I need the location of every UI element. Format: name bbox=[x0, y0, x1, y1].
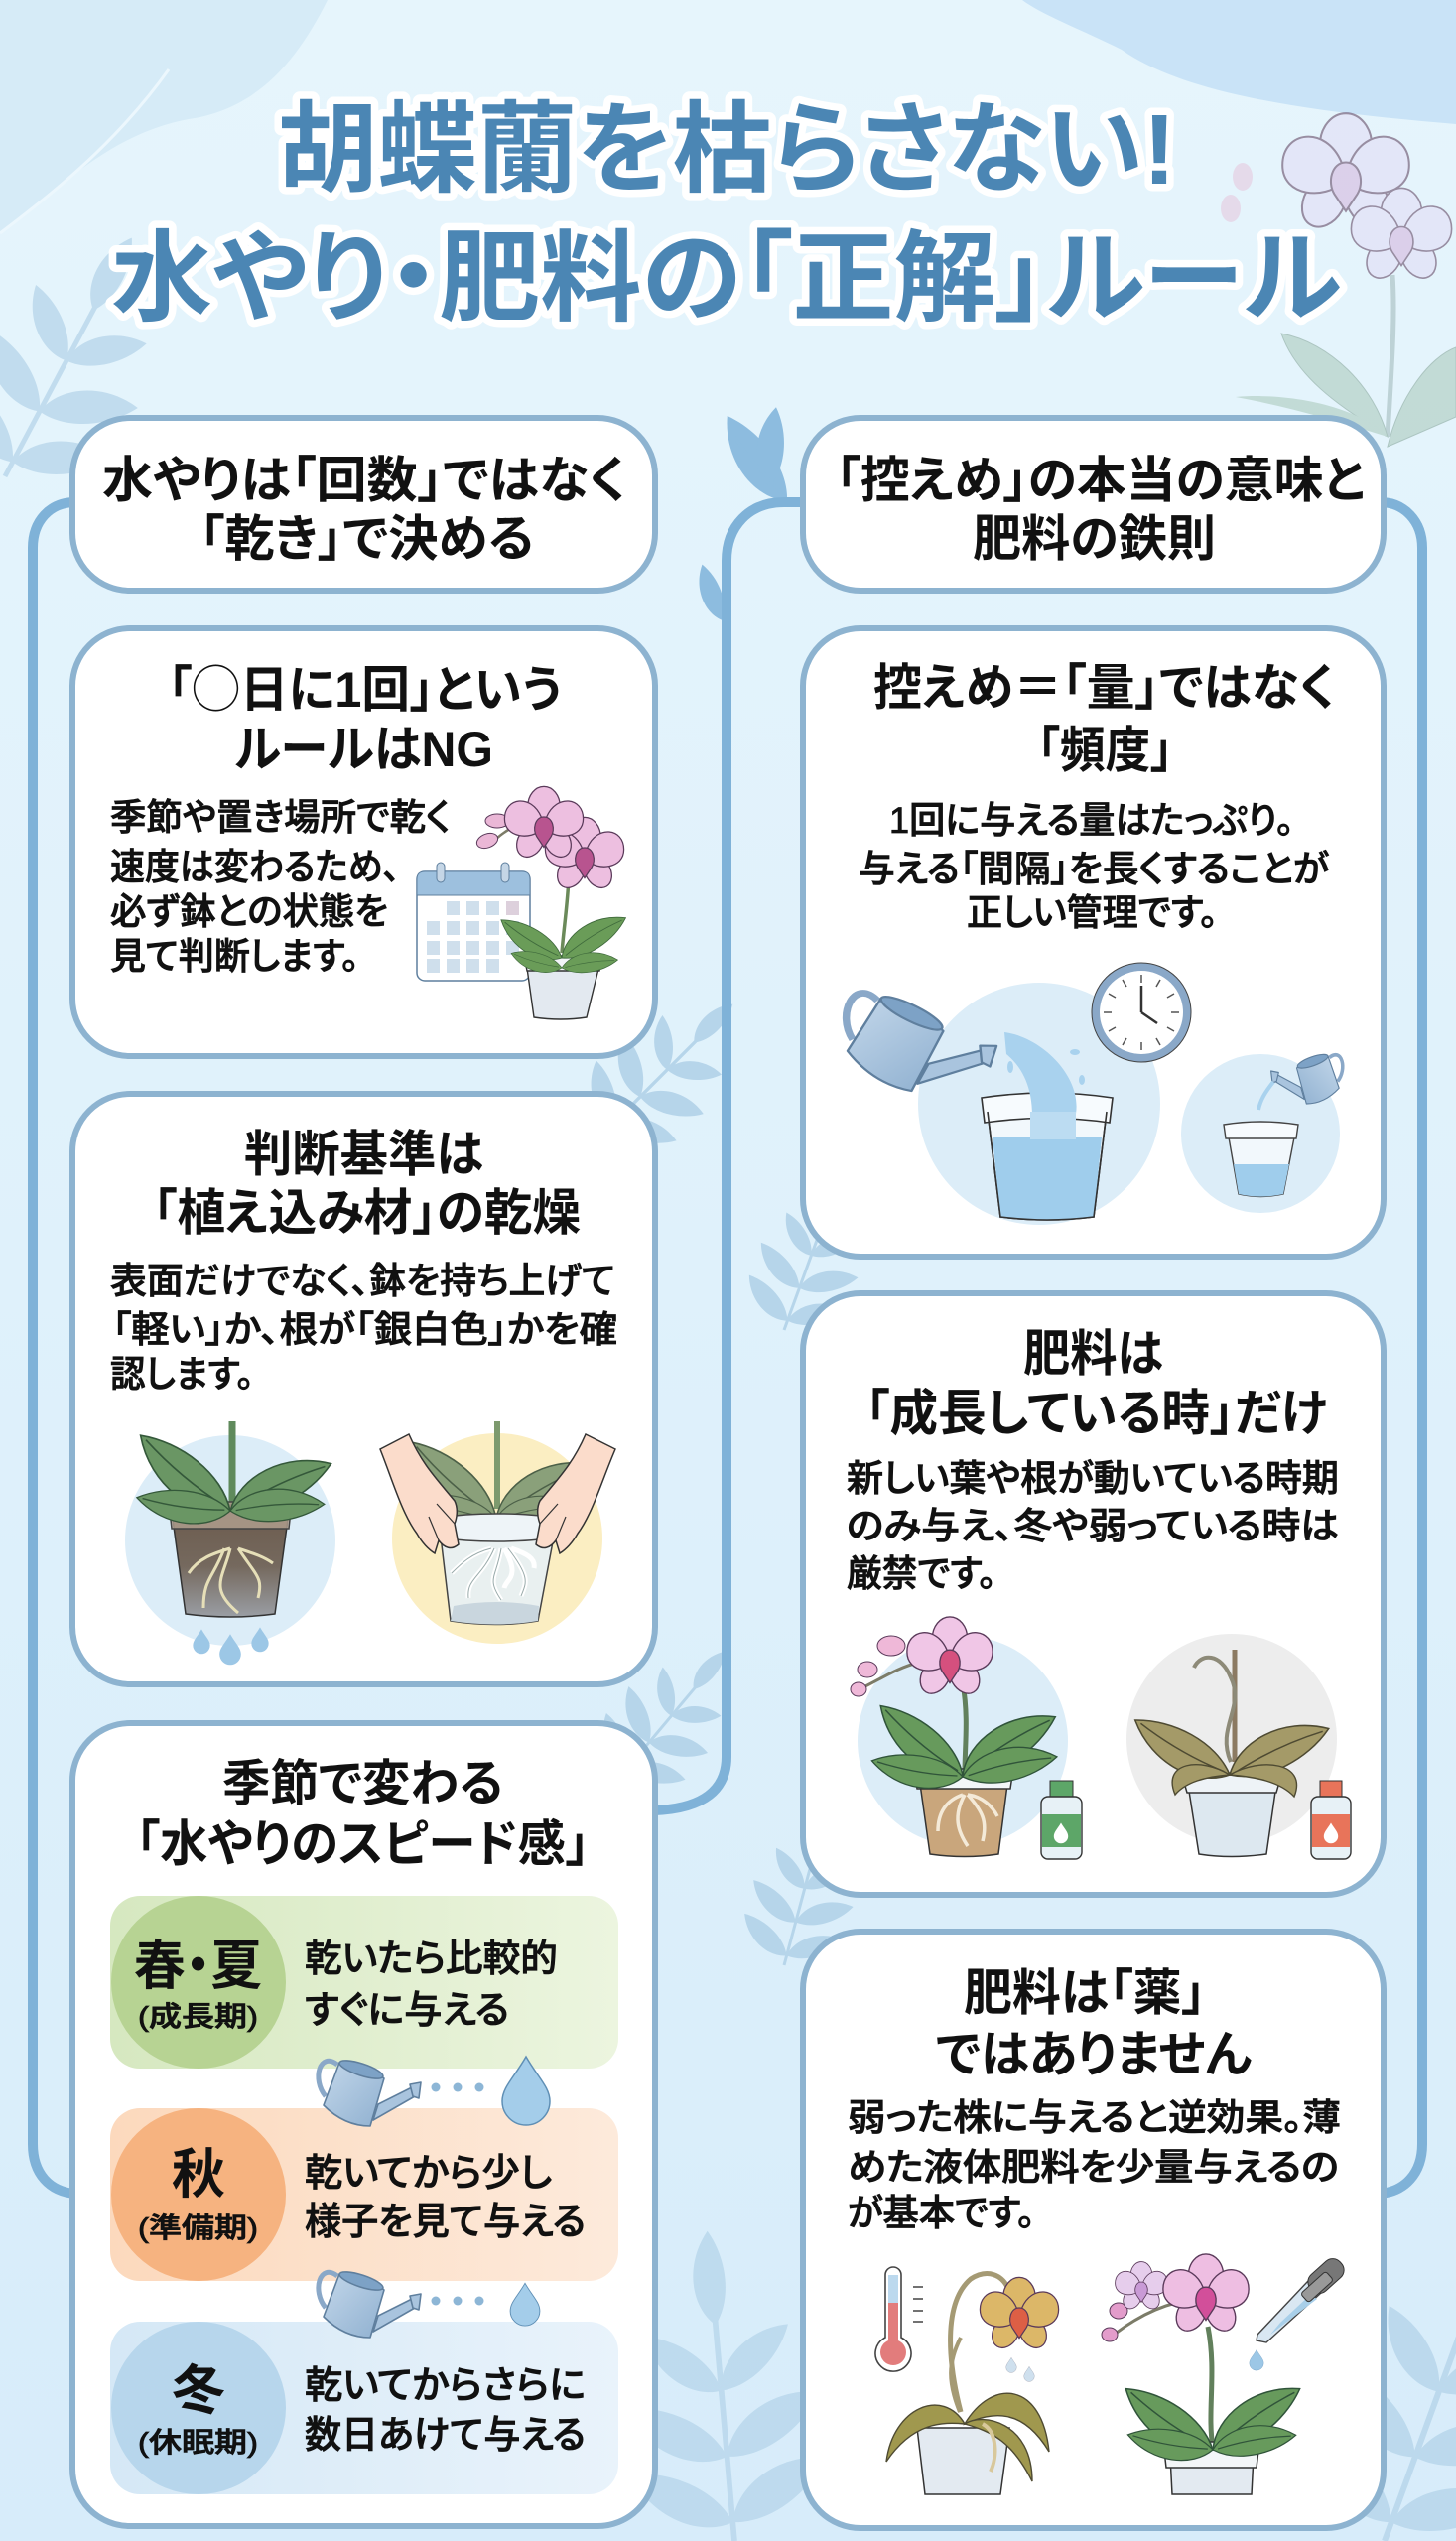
season row: winter: (休眠期) bbox=[138, 2427, 258, 2458]
heading: 判断基準は bbox=[244, 1127, 483, 1182]
heading bbox=[936, 1965, 1253, 2082]
heading: 肥料は「薬」 bbox=[964, 1965, 1206, 2021]
season row: autumn: 様子を見て与える bbox=[305, 2202, 586, 2243]
season row: winter bbox=[110, 2322, 618, 2494]
illustration: wilted orchid bbox=[886, 2274, 1059, 2494]
connector frame lines bbox=[33, 502, 1422, 2194]
body text: 「軽い」か、根が「銀白色」かを確 bbox=[112, 1309, 617, 1350]
heading: 「成長している時」だけ bbox=[865, 1386, 1327, 1441]
illustration: wet pot bbox=[125, 1421, 337, 1665]
body text: 見て判断します。 bbox=[110, 936, 359, 977]
panel: left header bbox=[72, 418, 655, 591]
heading: 「◯日に1回」という bbox=[168, 650, 562, 722]
illustration: healthy orchid bbox=[851, 1617, 1068, 1856]
body text bbox=[110, 797, 451, 977]
illustration: small watering bbox=[1181, 1052, 1343, 1213]
body text bbox=[859, 800, 1330, 933]
decoration: faded orchid bbox=[1221, 113, 1456, 447]
panel: left header: 水やりは「回数」ではなく bbox=[102, 453, 626, 508]
season row: spring summer: すぐに与える bbox=[305, 1990, 509, 2032]
icon: thermometer bbox=[875, 2267, 923, 2371]
panel: 判断基準 bbox=[72, 1094, 655, 1684]
heading: 「頻度」 bbox=[1037, 723, 1173, 778]
heading: 季節で変わる bbox=[222, 1756, 503, 1811]
panel: 季節 bbox=[72, 1723, 655, 2526]
season row: spring summer: (成長期) bbox=[138, 2001, 258, 2032]
heading bbox=[873, 660, 1335, 778]
illustration: healthy orchid with dropper bbox=[1102, 2254, 1308, 2494]
body text: が基本です。 bbox=[848, 2193, 1035, 2233]
title: 水やり・肥料の「正解」ルール bbox=[111, 223, 1342, 334]
icon: watering can with small drop bbox=[319, 2268, 540, 2338]
season row: autumn bbox=[110, 2108, 618, 2281]
body text: 弱った株に与えると逆効果。薄 bbox=[848, 2097, 1341, 2138]
illustration: weak orchid bbox=[1125, 1634, 1337, 1856]
heading: ルールはNG bbox=[234, 722, 493, 777]
body text bbox=[847, 1458, 1339, 1594]
illustration: ample watering bbox=[835, 983, 1160, 1225]
icon: potted orchid bbox=[474, 786, 631, 1019]
icon: dropper bbox=[1250, 2254, 1348, 2370]
icon: red fertilizer bottle bbox=[1311, 1781, 1351, 1859]
body text: のみ与え、冬や弱っている時は bbox=[847, 1506, 1339, 1546]
title: 胡蝶蘭を枯らさない! bbox=[278, 94, 1176, 205]
heading: 「水やりのスピード感」 bbox=[136, 1816, 590, 1872]
panel: 成長 bbox=[803, 1293, 1384, 1895]
body text: 速度は変わるため、 bbox=[110, 847, 400, 887]
heading: 控えめ＝「量」ではなく bbox=[873, 660, 1335, 716]
heading bbox=[168, 650, 562, 777]
body text: 与える「間隔」を長くすることが bbox=[859, 849, 1330, 889]
body text: 表面だけでなく、鉢を持ち上げて bbox=[110, 1261, 615, 1301]
heading bbox=[136, 1756, 590, 1872]
season row: winter: 冬 bbox=[172, 2361, 225, 2421]
season row: winter: 乾いてからさらに bbox=[305, 2365, 586, 2407]
heading bbox=[153, 1127, 581, 1241]
body text: 必ず鉢との状態を bbox=[110, 891, 388, 932]
season row: autumn: (準備期) bbox=[138, 2212, 258, 2243]
heading: ではありません bbox=[936, 2027, 1253, 2082]
panel: right header: 「控えめ」の本当の意味と bbox=[836, 453, 1365, 508]
body text: 季節や置き場所で乾く bbox=[110, 797, 451, 838]
icon: green fertilizer bottle bbox=[1041, 1781, 1082, 1859]
panel: 控えめ bbox=[803, 628, 1384, 1257]
panel: right header bbox=[803, 418, 1384, 591]
title bbox=[111, 94, 1342, 334]
season row: autumn: 乾いてから少し bbox=[305, 2153, 552, 2195]
season row: autumn: 秋 bbox=[172, 2145, 225, 2205]
panel: 薬 bbox=[803, 1932, 1384, 2528]
panel: 日数ルール bbox=[72, 628, 655, 1056]
body text: めた液体肥料を少量与えるの bbox=[848, 2147, 1339, 2188]
heading: 「植え込み材」の乾燥 bbox=[153, 1185, 581, 1241]
body text bbox=[110, 1261, 617, 1395]
icon: clock bbox=[1092, 963, 1191, 1062]
body text: 新しい葉や根が動いている時期 bbox=[847, 1458, 1339, 1499]
season row: spring summer bbox=[110, 1896, 618, 2069]
panel: right header: 肥料の鉄則 bbox=[973, 511, 1216, 567]
heading: 肥料は bbox=[1023, 1326, 1163, 1382]
panel: left header: 「乾き」で決める bbox=[199, 511, 534, 567]
body text: 1回に与える量はたっぷり。 bbox=[889, 800, 1294, 841]
icon: calendar bbox=[417, 863, 530, 981]
illustration: hands lifting pot bbox=[380, 1421, 615, 1644]
season row: winter: 数日あけて与える bbox=[305, 2415, 586, 2457]
body text: 厳禁です。 bbox=[847, 1553, 996, 1594]
season row: spring summer: 乾いたら比較的 bbox=[305, 1939, 558, 1980]
body text: 正しい管理です。 bbox=[967, 892, 1218, 933]
body text: 認します。 bbox=[110, 1354, 254, 1395]
icon: watering can with large drop bbox=[319, 2057, 550, 2126]
season row: spring summer: 春・夏 bbox=[134, 1937, 262, 1996]
body text bbox=[848, 2097, 1341, 2233]
heading bbox=[865, 1326, 1327, 1441]
